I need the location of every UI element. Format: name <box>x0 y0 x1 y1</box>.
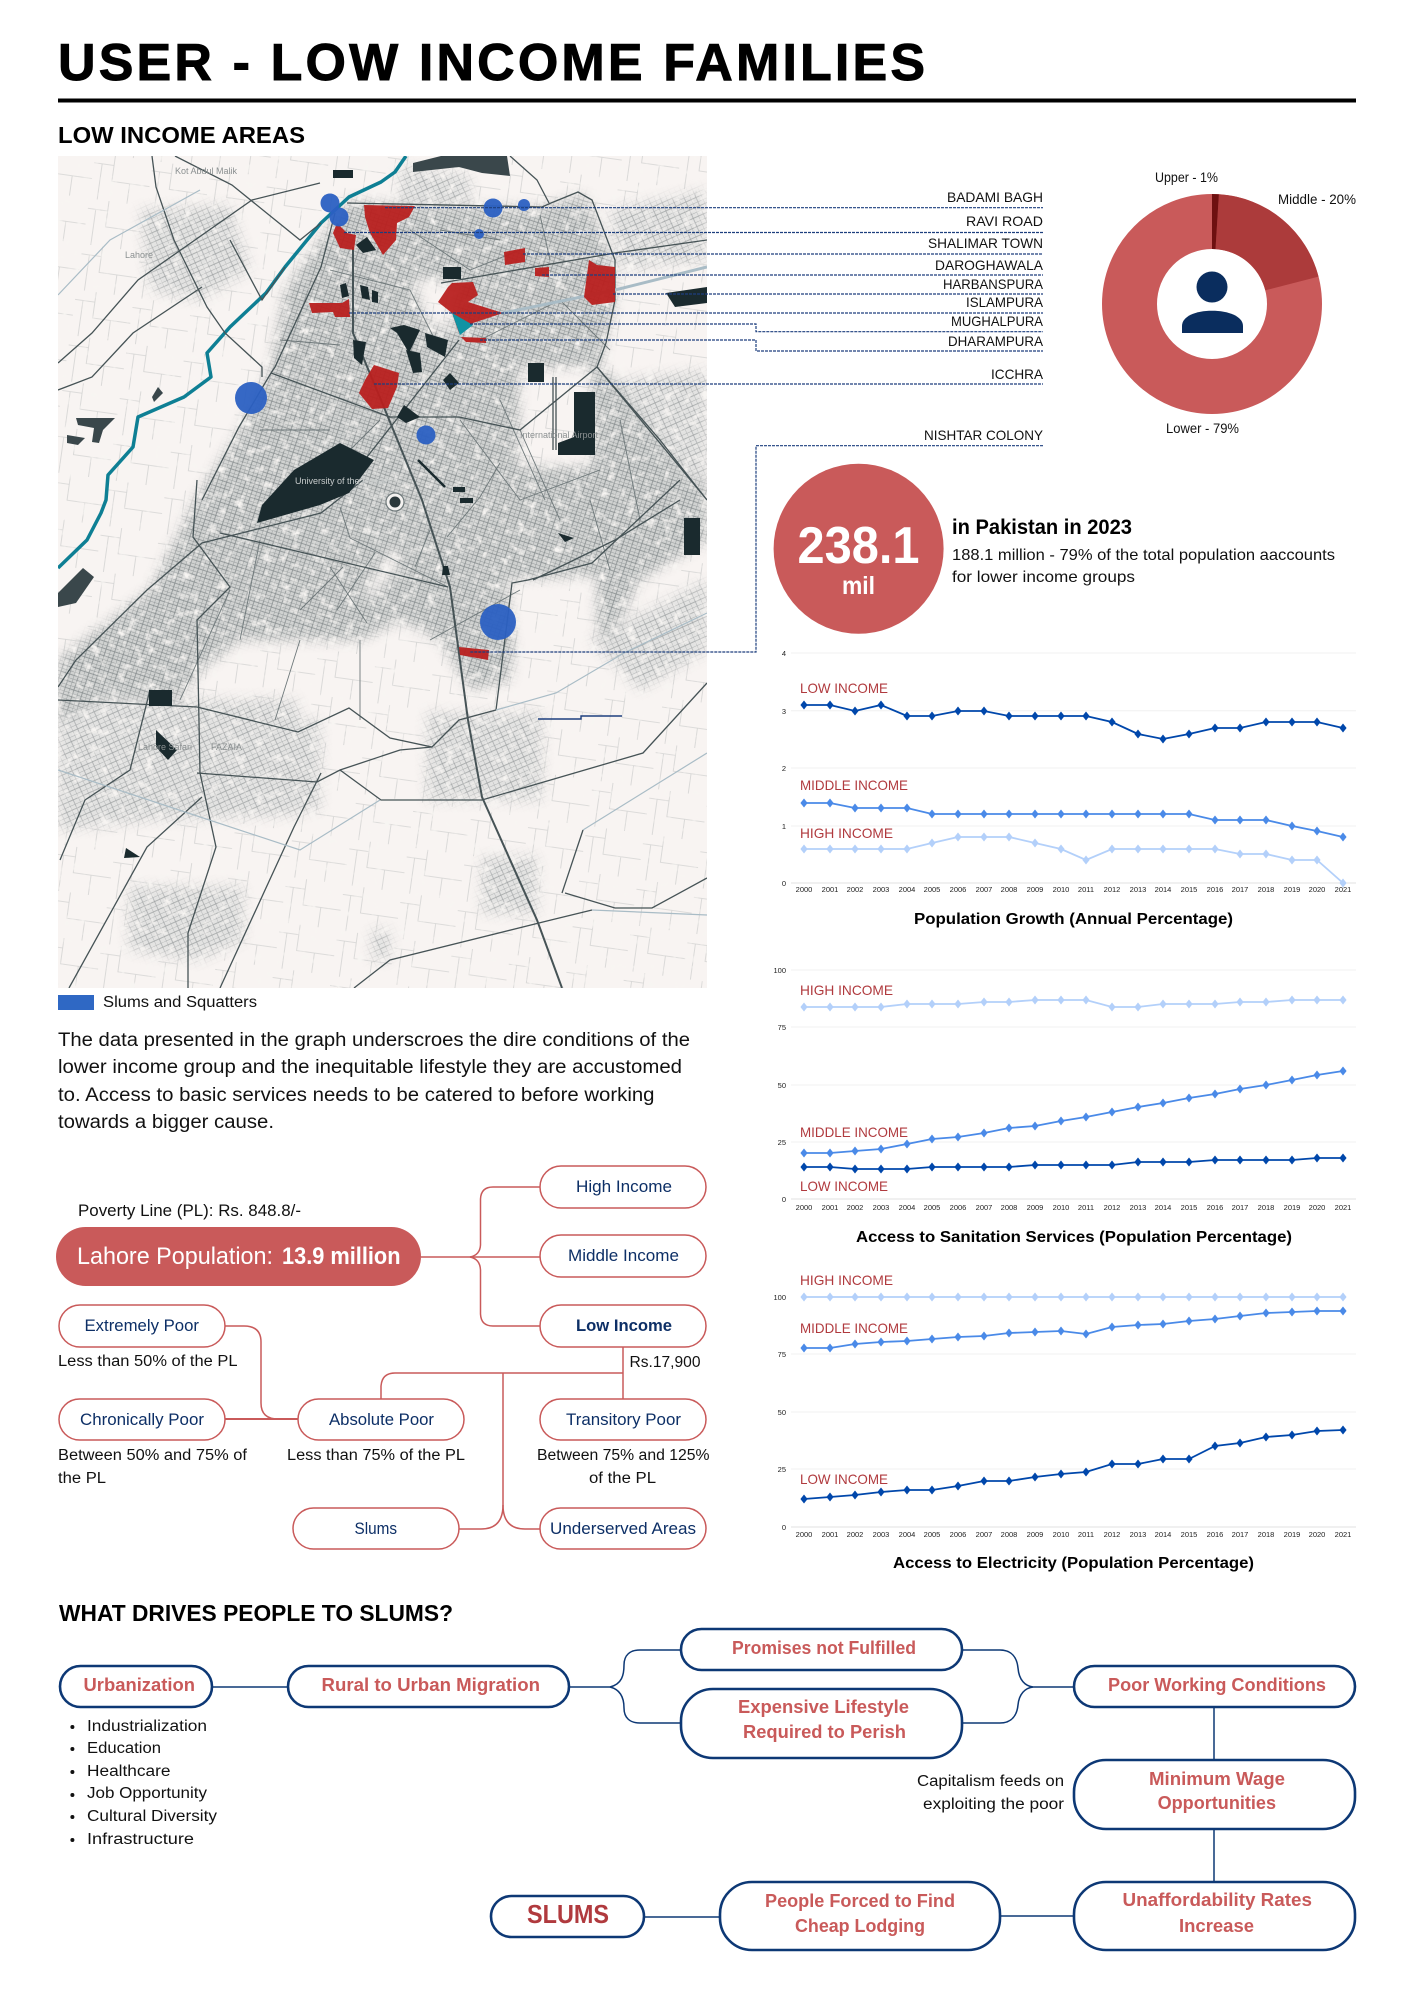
chart: population growth: HIGH INCOME <box>800 825 893 841</box>
note: chronically poor <box>58 1447 248 1487</box>
flow: slums <box>491 1896 644 1937</box>
pill: Lahore population: Lahore Population: <box>77 1243 273 1270</box>
chart: access to sanitation: 2005 <box>924 1203 940 1212</box>
urbanization bullet list: Education <box>87 1740 161 1757</box>
chart: population growth: 1 <box>782 822 786 831</box>
pill: extremely poor <box>59 1305 225 1347</box>
chart: access to electricity: 2021 <box>1335 1530 1351 1539</box>
chart: access to electricity: 2010 <box>1053 1530 1069 1539</box>
chart: population growth: 2005 <box>924 885 940 894</box>
urbanization bullet list: Job Opportunity <box>87 1785 207 1802</box>
note: transitory poor <box>537 1447 710 1487</box>
chart: access to electricity: HIGH INCOME <box>800 1272 893 1288</box>
chart: population growth: 2004 <box>899 885 915 894</box>
flow: unaffordability: Unaffordability Rates <box>1122 1890 1312 1910</box>
chart: population growth: 2006 <box>950 885 966 894</box>
map river <box>58 156 406 568</box>
chart: access to sanitation: 2021 <box>1335 1203 1351 1212</box>
chart: access to sanitation: 2012 <box>1104 1203 1120 1212</box>
chart: population growth: MIDDLE INCOME <box>800 777 908 793</box>
stat circle: 238.1 mil: 238.1 <box>798 517 920 575</box>
chart: population growth: 0 <box>782 879 786 888</box>
slum polygons <box>309 205 615 660</box>
chart: access to sanitation: 2019 <box>1284 1203 1300 1212</box>
chart: access to electricity: 2015 <box>1181 1530 1197 1539</box>
area labels: HARBANSPURA <box>943 276 1044 292</box>
flow: poor working conditions: Poor Working Conditions <box>1108 1675 1326 1695</box>
chart: access to electricity: 2017 <box>1232 1530 1248 1539</box>
chart: population growth: 2018 <box>1258 885 1274 894</box>
chart: population growth: 2000 <box>796 885 812 894</box>
income tree diagram <box>56 1166 710 1549</box>
chart: access to electricity: Access to Electricity (Population Percentage) <box>893 1555 1254 1572</box>
heading: low income areas: LOW INCOME AREAS <box>58 122 305 148</box>
chart: population growth: 2007 <box>976 885 992 894</box>
urbanization bullet list: Cultural Diversity <box>87 1808 217 1825</box>
pill: absolute poor <box>298 1399 464 1440</box>
heading: what drives people to slums: WHAT DRIVES PEOPLE TO SLUMS? <box>59 1600 453 1626</box>
stat circle: 238.1 mil <box>774 464 944 634</box>
stat text: 188.1 million - 79% of the total population aaccounts <box>952 547 1335 564</box>
pill: low income: Low Income <box>576 1317 672 1335</box>
chart: population growth: 2011 <box>1078 885 1094 894</box>
flow diagram connectors <box>212 1650 1214 1917</box>
pill: chronically poor <box>59 1399 225 1440</box>
urbanization bullet list: Industrialization <box>87 1718 207 1735</box>
note: capitalism: Capitalism feeds on <box>917 1773 1064 1790</box>
pill: slums <box>293 1508 459 1549</box>
note: transitory poor: Between 75% and 125% <box>537 1447 710 1464</box>
pill: underserved areas <box>540 1508 706 1549</box>
flow: expensive lifestyle <box>681 1689 962 1758</box>
title: USER - LOW INCOME FAMILIES <box>58 34 925 92</box>
chart: access to sanitation: 2004 <box>899 1203 915 1212</box>
flow: people forced: People Forced to Find <box>765 1891 955 1911</box>
chart: access to sanitation: 2002 <box>847 1203 863 1212</box>
map place names <box>125 166 599 752</box>
chart: population growth: 2015 <box>1181 885 1197 894</box>
stat text <box>952 516 1335 586</box>
pill: middle income <box>540 1235 706 1277</box>
paragraph: The data presented in the graph underscroes the dire conditions of the <box>58 1030 690 1051</box>
chart: access to sanitation: 2010 <box>1053 1203 1069 1212</box>
area labels: NISHTAR COLONY <box>924 427 1044 443</box>
flow: rural to urban migration <box>288 1666 569 1707</box>
map place names: FAZAIA <box>211 742 242 752</box>
map place names: Kot Abdul Malik <box>175 166 238 176</box>
note: transitory poor: of the PL <box>589 1470 656 1487</box>
pill: underserved areas: Underserved Areas <box>550 1520 696 1538</box>
chart: access to sanitation: HIGH INCOME <box>800 982 893 998</box>
pill: chronically poor: Chronically Poor <box>80 1411 205 1429</box>
pill: Lahore population: 13.9 million <box>282 1243 400 1270</box>
note: chronically poor: Between 50% and 75% of <box>58 1447 248 1464</box>
donut chart: income groups: Lower - 79% <box>1166 420 1239 436</box>
flow: promises not fulfilled: Promises not Fulfilled <box>732 1638 916 1658</box>
chart: access to sanitation: 2011 <box>1078 1203 1094 1212</box>
chart: access to sanitation: 2013 <box>1130 1203 1146 1212</box>
chart: access to sanitation: 2020 <box>1309 1203 1325 1212</box>
chart: access to sanitation: 100 <box>773 966 786 975</box>
chart: access to electricity <box>773 1272 1356 1572</box>
chart: access to electricity: 2004 <box>899 1530 915 1539</box>
chart: access to sanitation: 50 <box>778 1081 786 1090</box>
map dark landmark blocks <box>58 156 707 858</box>
chart: population growth: Population Growth (Annual Percentage) <box>914 911 1233 928</box>
chart: access to sanitation: 0 <box>782 1195 786 1204</box>
chart: population growth: LOW INCOME <box>800 680 888 696</box>
poverty line note: Poverty Line (PL): Rs. 848.8/- <box>78 1201 301 1220</box>
chart: access to electricity: 2014 <box>1155 1530 1171 1539</box>
chart: access to sanitation: 2001 <box>822 1203 838 1212</box>
chart: access to sanitation: 2015 <box>1181 1203 1197 1212</box>
chart: population growth <box>782 649 1356 928</box>
pill: middle income: Middle Income <box>568 1247 679 1265</box>
flow: minimum wage <box>1074 1760 1355 1829</box>
map of Lahore <box>58 156 707 988</box>
note: extremely poor: Less than 50% of the PL <box>58 1353 238 1370</box>
chart: access to sanitation: 2006 <box>950 1203 966 1212</box>
chart: access to sanitation <box>773 966 1356 1246</box>
chart: access to electricity: 0 <box>782 1523 786 1532</box>
pill: high income <box>540 1166 706 1208</box>
area labels: DHARAMPURA <box>948 333 1044 349</box>
chart: population growth: 4 <box>782 649 786 658</box>
chart: access to electricity: 2001 <box>822 1530 838 1539</box>
flow: slums: SLUMS <box>527 1899 609 1929</box>
chart: access to sanitation: 2008 <box>1001 1203 1017 1212</box>
area labels: BADAMI BAGH <box>947 189 1043 205</box>
title rule <box>58 98 1356 102</box>
area labels: MUGHALPURA <box>951 313 1044 329</box>
chart: access to electricity: LOW INCOME <box>800 1471 888 1487</box>
paragraph: to. Access to basic services needs to be catered to before working <box>58 1085 654 1106</box>
pill: Lahore population <box>56 1227 421 1286</box>
chart: access to electricity: 2003 <box>873 1530 889 1539</box>
map roads <box>58 156 707 988</box>
chart: access to electricity: 2018 <box>1258 1530 1274 1539</box>
map place names: International Airport <box>520 430 599 440</box>
chart: access to electricity: 100 <box>773 1293 786 1302</box>
area labels: RAVI ROAD <box>966 213 1043 229</box>
pill: low income <box>540 1305 706 1347</box>
chart: access to electricity: 75 <box>778 1350 786 1359</box>
stat circle: 238.1 mil: mil <box>842 572 875 600</box>
chart: access to electricity: 2012 <box>1104 1530 1120 1539</box>
flow: unaffordability <box>1074 1882 1355 1950</box>
chart: access to sanitation: 2007 <box>976 1203 992 1212</box>
area labels: ICCHRA <box>991 366 1044 382</box>
tree connectors <box>225 1187 623 1529</box>
chart: access to sanitation: 2014 <box>1155 1203 1171 1212</box>
chart: access to electricity: 2013 <box>1130 1530 1146 1539</box>
map urban fabric <box>58 156 707 988</box>
pill: absolute poor: Absolute Poor <box>329 1411 435 1429</box>
chart: population growth: 2 <box>782 764 786 773</box>
chart: access to sanitation: 2009 <box>1027 1203 1043 1212</box>
chart: access to sanitation: LOW INCOME <box>800 1178 888 1194</box>
area labels: ISLAMPURA <box>966 294 1044 310</box>
map place names: University of the Punjab <box>295 476 390 486</box>
note: chronically poor: the PL <box>58 1470 106 1487</box>
pill: transitory poor <box>540 1399 706 1440</box>
flow: minimum wage: Minimum Wage <box>1149 1769 1285 1789</box>
chart: population growth: 2021 <box>1335 885 1351 894</box>
chart: access to electricity: 25 <box>778 1465 786 1474</box>
chart: population growth: 2013 <box>1130 885 1146 894</box>
chart: access to sanitation: 25 <box>778 1138 786 1147</box>
chart: access to sanitation: 75 <box>778 1023 786 1032</box>
map legend: Slums and Squatters <box>103 994 257 1011</box>
chart: access to electricity: MIDDLE INCOME <box>800 1320 908 1336</box>
chart: population growth: 2008 <box>1001 885 1017 894</box>
chart: access to sanitation: 2003 <box>873 1203 889 1212</box>
flow: urbanization: Urbanization <box>84 1675 195 1695</box>
note: absolute poor: Less than 75% of the PL <box>287 1447 465 1464</box>
chart: population growth: 2014 <box>1155 885 1171 894</box>
chart: access to sanitation: Access to Sanitation Services (Population Percentage) <box>856 1229 1292 1246</box>
chart: population growth: 2001 <box>822 885 838 894</box>
chart: access to electricity: 2019 <box>1284 1530 1300 1539</box>
pill: extremely poor: Extremely Poor <box>84 1317 200 1335</box>
flow: rural to urban migration: Rural to Urban Migration <box>322 1675 540 1695</box>
chart: population growth: 3 <box>782 707 786 716</box>
paragraph: lower income group and the inequitable lifestyle they are accustomed <box>58 1057 682 1078</box>
donut chart: income groups <box>1130 169 1356 436</box>
leader lines <box>344 208 1043 652</box>
flow: people forced: Cheap Lodging <box>795 1916 925 1936</box>
chart: access to electricity: 2011 <box>1078 1530 1094 1539</box>
chart: access to electricity: 2007 <box>976 1530 992 1539</box>
urbanization bullet list: Infrastructure <box>87 1831 194 1848</box>
flow: unaffordability: Increase <box>1179 1916 1254 1936</box>
area labels <box>924 189 1044 443</box>
chart: access to sanitation: 2018 <box>1258 1203 1274 1212</box>
note: capitalism <box>917 1773 1064 1813</box>
chart: population growth: 2019 <box>1284 885 1300 894</box>
flow: expensive lifestyle: Required to Perish <box>743 1722 906 1742</box>
chart: population growth: 2017 <box>1232 885 1248 894</box>
squatter circles <box>235 194 530 640</box>
pill: slums: Slums <box>354 1519 397 1538</box>
chart: access to sanitation: 2016 <box>1207 1203 1223 1212</box>
chart: access to electricity: 2006 <box>950 1530 966 1539</box>
chart: access to sanitation: 2017 <box>1232 1203 1248 1212</box>
chart: access to electricity: 2005 <box>924 1530 940 1539</box>
chart: access to electricity: 2016 <box>1207 1530 1223 1539</box>
chart: access to electricity: 2020 <box>1309 1530 1325 1539</box>
note: capitalism: exploiting the poor <box>923 1796 1064 1813</box>
map place names: Lahore <box>125 250 153 260</box>
paragraph: towards a bigger cause. <box>58 1112 274 1133</box>
area labels: DAROGHAWALA <box>935 257 1044 273</box>
chart: access to electricity: 2000 <box>796 1530 812 1539</box>
chart: access to sanitation: 2000 <box>796 1203 812 1212</box>
icon: person <box>1182 272 1243 333</box>
chart: population growth: 2009 <box>1027 885 1043 894</box>
chart: access to electricity: 50 <box>778 1408 786 1417</box>
donut chart: income groups: Middle - 20% <box>1278 191 1356 207</box>
paragraph <box>58 1030 690 1133</box>
chart: population growth: 2002 <box>847 885 863 894</box>
flow: minimum wage: Opportunities <box>1158 1793 1276 1813</box>
donut chart: income groups: Upper - 1% <box>1155 169 1218 185</box>
area labels: SHALIMAR TOWN <box>928 235 1043 251</box>
flow: promises not fulfilled <box>681 1629 962 1670</box>
chart: population growth: 2003 <box>873 885 889 894</box>
chart: population growth: 2012 <box>1104 885 1120 894</box>
chart: access to electricity: 2002 <box>847 1530 863 1539</box>
map place names: Lahore Safari <box>138 742 192 752</box>
flow: expensive lifestyle: Expensive Lifestyle <box>738 1697 909 1717</box>
flow: urbanization <box>60 1666 212 1707</box>
pill: transitory poor: Transitory Poor <box>566 1411 682 1429</box>
chart: population growth: 2010 <box>1053 885 1069 894</box>
stat text: in Pakistan in 2023 <box>952 516 1132 539</box>
urbanization bullet list <box>70 1718 217 1848</box>
flow: people forced <box>720 1882 1000 1950</box>
flow: poor working conditions <box>1074 1666 1355 1707</box>
pill: high income: High Income <box>576 1178 672 1196</box>
stat text: for lower income groups <box>952 569 1135 586</box>
chart: access to sanitation: MIDDLE INCOME <box>800 1124 908 1140</box>
urbanization bullet list: Healthcare <box>87 1763 170 1780</box>
chart: population growth: 2020 <box>1309 885 1325 894</box>
chart: access to electricity: 2009 <box>1027 1530 1043 1539</box>
chart: access to electricity: 2008 <box>1001 1530 1017 1539</box>
note: low income amount: Rs.17,900 <box>630 1354 701 1371</box>
chart: population growth: 2016 <box>1207 885 1223 894</box>
